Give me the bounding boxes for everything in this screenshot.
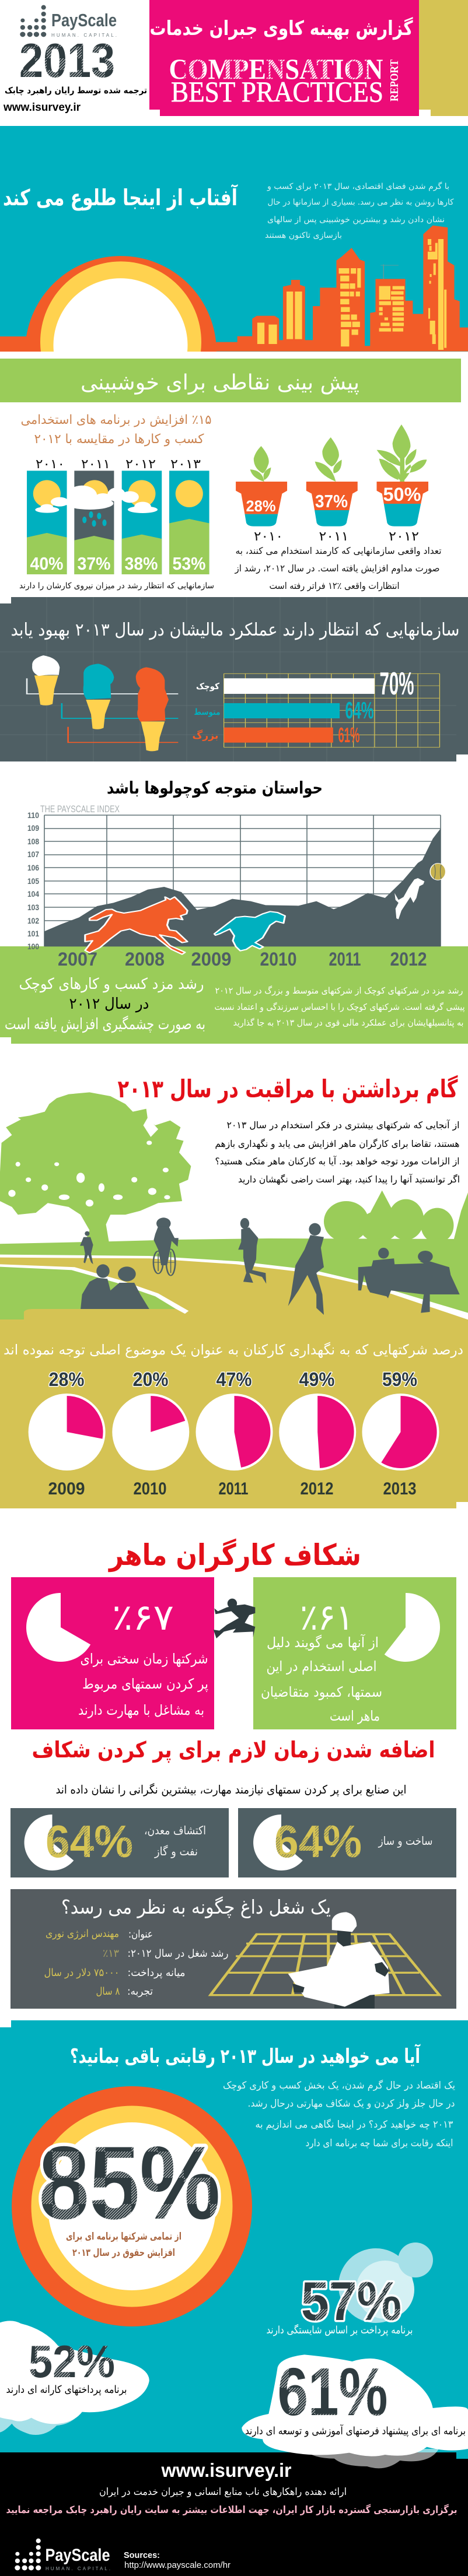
pie 2013: 2013 bbox=[383, 1479, 417, 1498]
weather values bbox=[30, 553, 205, 574]
pot years: ۲۰۱۰ bbox=[254, 529, 283, 544]
chart label: THE PAYSCALE INDEX bbox=[40, 803, 120, 815]
highlight text bbox=[5, 975, 205, 1033]
best practices: BEST PRACTICES bbox=[171, 75, 383, 108]
panel: hot job bbox=[11, 1889, 456, 2009]
heading: آفتاب از اینجا طلوع می کند bbox=[3, 184, 238, 210]
pie 2011: 2011 bbox=[218, 1479, 249, 1498]
text: از آنها می گویند دلیل bbox=[267, 1634, 379, 1651]
label medium: متوسط bbox=[194, 707, 221, 717]
heading: skills gap: شکاف کارگران ماهر bbox=[107, 1538, 361, 1573]
person: small walker bbox=[80, 1231, 93, 1264]
index area bbox=[44, 829, 441, 946]
panel: title banner bbox=[149, 0, 419, 116]
panel: construction bbox=[238, 1808, 456, 1877]
ball bbox=[430, 864, 446, 880]
highlight text: رشد مزد کسب و کارهای کوچک bbox=[19, 975, 204, 993]
panel: stay competitive bbox=[0, 2020, 468, 2468]
intro text: در حال جلز ولز کردن و یک شکاف مهارتی درحال رشد. bbox=[247, 2098, 455, 2110]
weather values: 40% bbox=[30, 553, 63, 574]
plant pots chart bbox=[236, 424, 428, 527]
weather values: 53% bbox=[173, 553, 205, 574]
axis numbers: 103 bbox=[27, 903, 39, 912]
body text: careful steps: از الزامات مورد توجه خواهد بود. آیا به کارکنان ماهر متکی هستید؟ bbox=[215, 1156, 460, 1167]
52 percent caption: برنامه پرداختهای کارانه ای دارند bbox=[6, 2384, 127, 2396]
grid bbox=[44, 815, 441, 946]
body text: careful steps: هستند، تقاضا برای کارگران ماهر افزایش می یابد و نگهداری بازهم bbox=[215, 1138, 460, 1150]
pot years bbox=[254, 529, 419, 544]
panel: mining: اکتشاف معدن، bbox=[144, 1823, 206, 1837]
panel: mining bbox=[11, 1808, 229, 1877]
weather caption: سازمانهایی که انتظار رشد در میزان نیروی کارشان را دارند bbox=[19, 581, 214, 591]
panel: forecast heading: پیش بینی نقاطی برای خوشبینی bbox=[81, 371, 359, 395]
intro text: نشان دادن رشد و بیشترین خوشبینی پس از سالهای bbox=[267, 215, 445, 224]
value medium: 64% bbox=[345, 697, 373, 724]
axis numbers: 105 bbox=[27, 876, 39, 886]
header logo: PayScale: HUMAN. CAPITAL. bbox=[51, 33, 117, 38]
ice cream cones bbox=[27, 655, 178, 751]
axis numbers: 107 bbox=[27, 850, 39, 859]
body text bbox=[215, 985, 464, 1029]
intro text: بازسازی تاکنون هستند bbox=[265, 231, 342, 240]
axis numbers: 108 bbox=[27, 837, 39, 846]
pie 2012 bbox=[279, 1368, 356, 1498]
highlight text: به صورت چشمگیری افزایش یافته است bbox=[5, 1015, 205, 1033]
grass bbox=[0, 1238, 468, 1324]
weather years bbox=[36, 457, 201, 472]
text: شرکتها زمان سختی برای bbox=[81, 1651, 208, 1667]
weather chart bbox=[27, 471, 209, 574]
orange dog bbox=[85, 897, 187, 954]
pot 2010 bbox=[236, 482, 287, 527]
subheading: hiring increase: ٪۱۵ افزایش در برنامه های استخدامی bbox=[21, 413, 211, 427]
hiring text: انتظارات واقعی ٪۱۲ فراتر رفته است bbox=[270, 580, 399, 592]
year 2013: 2013 bbox=[19, 33, 115, 87]
pot 2011 bbox=[306, 482, 358, 527]
rain bbox=[82, 511, 107, 527]
subheading: این صنایع برای پر کردن سمتهای نیازمند مهارت، بیشترین نگرانی را نشان داده اند bbox=[56, 1782, 406, 1797]
city skyline bbox=[209, 226, 468, 352]
far trees bbox=[324, 1191, 468, 1243]
value small: 70% bbox=[379, 665, 414, 701]
hiring text: صورت مداوم افزایش یافته است. در سال ۲۰۱۲، رشد از bbox=[235, 563, 440, 574]
panel 2012 bbox=[122, 471, 162, 574]
job title: عنوان: bbox=[128, 1928, 153, 1940]
body text: careful steps bbox=[215, 1119, 460, 1185]
label small: کوچک bbox=[196, 681, 219, 692]
85 percent caption bbox=[66, 2231, 181, 2259]
large tree bbox=[0, 1092, 191, 1242]
value large: 61% bbox=[338, 723, 359, 747]
axis numbers: 101 bbox=[27, 929, 39, 938]
panel: financial performance bbox=[0, 597, 468, 761]
pale cloud bbox=[338, 2242, 433, 2323]
axis numbers: 110 bbox=[27, 810, 39, 820]
pie 2010: 2010 bbox=[133, 1479, 167, 1498]
pie 2013: 59% bbox=[382, 1368, 417, 1390]
pot values: 50% bbox=[383, 484, 421, 505]
panel: sunrise bbox=[0, 126, 468, 352]
panel: small business growth bbox=[0, 946, 468, 1044]
highlight text: در سال ۲۰۱۲ bbox=[69, 995, 149, 1013]
body text: careful steps: اگر توانستید آنها را پیدا کنید، بهتر است راضی نگهشان دارید bbox=[238, 1174, 460, 1185]
pot values: 28% bbox=[246, 497, 275, 515]
pie 2009: 2009 bbox=[48, 1479, 85, 1498]
intro text bbox=[223, 2079, 455, 2149]
body text: رشد مزد در شرکتهای کوچک از شرکتهای متوسط و بزرگ در سال ۲۰۱۲ bbox=[215, 985, 463, 996]
axis numbers: 106 bbox=[27, 863, 39, 872]
cover bbox=[0, 1309, 185, 1324]
text: اصلی استخدام در این bbox=[266, 1658, 377, 1675]
57 percent: 57% bbox=[301, 2270, 401, 2332]
pie 2011 bbox=[196, 1368, 273, 1498]
heading: یک شغل داغ چگونه به نظر می رسد؟ bbox=[61, 1896, 331, 1918]
park illustration bbox=[0, 1092, 468, 1324]
text: سمتها، کمبود متقاضیان bbox=[261, 1684, 382, 1700]
pot years: ۲۰۱۲ bbox=[389, 529, 419, 544]
body text: careful steps: از آنجایی که شرکتهای بیشتری در فکر استخدام در سال ۲۰۱۳ bbox=[226, 1119, 460, 1131]
pie 2012: 49% bbox=[299, 1368, 335, 1390]
weather values: 37% bbox=[77, 553, 111, 574]
footer bbox=[6, 2459, 457, 2571]
85 percent caption: از تمامی شرکتها برنامه ای برای bbox=[66, 2231, 181, 2242]
body text: به پتانسیلهایشان برای عملکرد مالی قوی در سال ۲۰۱۳ به جا گذارید bbox=[233, 1017, 463, 1029]
white dog bbox=[394, 878, 424, 920]
hiring text bbox=[235, 545, 441, 592]
person: runner bbox=[238, 1218, 266, 1284]
sun bbox=[0, 256, 216, 352]
median pay: ۷۵۰۰۰ دلار در سال bbox=[44, 1967, 120, 1979]
payscale index chart bbox=[27, 810, 446, 954]
footer logo: HUMAN. CAPITAL. bbox=[46, 2566, 110, 2571]
translator credit: ترجمه شده توسط رایان راهبرد چابک bbox=[5, 85, 147, 96]
text bbox=[78, 1651, 208, 1718]
text: پر کردن سمتهای مربوط bbox=[82, 1676, 208, 1692]
chart years: 2009 bbox=[191, 949, 231, 970]
pie 2011: 47% bbox=[216, 1368, 252, 1390]
median pay: میانه پرداخت: bbox=[127, 1967, 186, 1979]
pie bbox=[385, 1593, 440, 1662]
panel 2010 bbox=[27, 471, 67, 574]
chart years: 2011 bbox=[329, 949, 361, 970]
panel 2013 bbox=[169, 471, 209, 574]
intro text: کارها روشن به نظر می رسد. بسیاری از سازمانها در حال bbox=[267, 198, 454, 207]
52 percent: 52% bbox=[29, 2336, 115, 2387]
experience bbox=[96, 1985, 153, 1998]
text: ماهر است bbox=[330, 1708, 380, 1724]
pie 2010: 20% bbox=[133, 1368, 168, 1390]
compensation: COMPENSATION bbox=[169, 52, 383, 85]
value: ٪۶۱ bbox=[300, 1596, 354, 1638]
panel: retention bbox=[0, 1319, 468, 1508]
panel: mining: 64% bbox=[46, 1816, 133, 1867]
path bbox=[0, 1255, 468, 1324]
pie 2010 bbox=[112, 1368, 189, 1498]
job title: مهندس انرژی نوری bbox=[46, 1928, 119, 1940]
report: REPORT bbox=[388, 59, 401, 101]
axis numbers: 102 bbox=[27, 916, 39, 925]
footer line: ارائه دهنده راهکارهای ناب منابع انسانی و جبران خدمت در ایران bbox=[99, 2486, 347, 2498]
intro text: با گرم شدن فضای اقتصادی، سال ۲۰۱۳ برای کسب و bbox=[267, 181, 449, 191]
panel: forecast heading bbox=[0, 359, 461, 402]
pie bbox=[26, 1593, 90, 1662]
person: cyclist bbox=[153, 1217, 179, 1276]
axis numbers: 104 bbox=[27, 889, 39, 899]
panel: mining: نفت و گاز bbox=[154, 1844, 198, 1858]
pie 2009 bbox=[29, 1368, 106, 1498]
footer black band bbox=[0, 2452, 468, 2576]
footer website: www.isurvey.ir bbox=[161, 2459, 292, 2481]
chart years: 2007 bbox=[58, 949, 97, 970]
axis numbers: 100 bbox=[27, 942, 39, 951]
job growth: رشد شغل در سال ۲۰۱۲: bbox=[127, 1947, 229, 1960]
header logo: PayScale bbox=[20, 5, 117, 38]
worker bbox=[288, 1912, 390, 2009]
panel: construction: ساخت و ساز bbox=[378, 1834, 433, 1848]
85 percent caption: افزایش حقوق در سال ۲۰۱۳ bbox=[72, 2247, 175, 2259]
panel: 67 percent bbox=[11, 1577, 214, 1729]
pot 2012 bbox=[377, 482, 428, 527]
experience: تجربه: bbox=[127, 1985, 153, 1998]
pie 2012: 2012 bbox=[300, 1479, 334, 1498]
panel: 61 percent bbox=[253, 1577, 456, 1729]
pot values: 37% bbox=[315, 491, 348, 511]
footer logo bbox=[15, 2539, 110, 2571]
intro text bbox=[265, 181, 454, 240]
chart years: 2008 bbox=[125, 949, 165, 970]
bar chart bbox=[193, 665, 439, 747]
big sun bbox=[12, 2086, 252, 2326]
left cloud bbox=[0, 2321, 149, 2435]
plants bbox=[250, 424, 427, 482]
subheading: hiring increase bbox=[21, 413, 211, 447]
85 percent: 85% bbox=[39, 2125, 221, 2241]
chart years: 2012 bbox=[390, 949, 427, 970]
pot years: ۲۰۱۱ bbox=[319, 529, 349, 544]
footer logo: PayScale bbox=[46, 2546, 110, 2565]
value: ٪۶۷ bbox=[112, 1596, 174, 1638]
people on bench bbox=[358, 1248, 460, 1313]
text: به مشاغل با مهارت دارند bbox=[78, 1702, 204, 1718]
chart years: 2010 bbox=[260, 949, 296, 970]
heading: small companies: حواستان متوجه کوچولوها باشد bbox=[107, 778, 323, 798]
61 percent: 61% bbox=[278, 2354, 387, 2430]
icon: jumping man bbox=[214, 1599, 255, 1638]
pot values bbox=[246, 484, 421, 515]
experience: ۸ سال bbox=[96, 1985, 120, 1998]
clouds bbox=[35, 486, 158, 513]
right cloud bbox=[242, 2354, 468, 2468]
teal dog bbox=[214, 911, 285, 951]
person: woman walking bbox=[288, 1223, 324, 1315]
intro text: یک اقتصاد در حال گرم شدن، یک بخش کسب و کاری کوچک bbox=[223, 2079, 455, 2091]
pie 2009: 28% bbox=[49, 1368, 84, 1390]
chart years bbox=[58, 949, 427, 970]
weather values: 38% bbox=[125, 553, 158, 574]
text bbox=[261, 1634, 382, 1724]
sources bbox=[124, 2550, 230, 2570]
weather years: ۲۰۱۱ bbox=[81, 457, 110, 472]
sources: Sources: bbox=[124, 2550, 160, 2560]
intro text: اینکه رقابت برای شما چه برنامه ای دارد bbox=[306, 2138, 453, 2149]
axis numbers bbox=[27, 810, 39, 951]
57 percent caption: برنامه پرداخت بر اساس شایستگی دارند bbox=[266, 2324, 413, 2336]
axis numbers: 109 bbox=[27, 823, 39, 833]
heading: آیا می خواهید در سال ۲۰۱۳ رقابتی باقی بمانید؟ bbox=[70, 2044, 421, 2068]
solar panel bbox=[211, 1934, 439, 1995]
header logo: PayScale: PayScale bbox=[51, 10, 117, 30]
sources: http://www.payscale.com/hr bbox=[124, 2560, 230, 2570]
couple foreground bbox=[81, 1264, 149, 1309]
white sun bottom bbox=[54, 352, 187, 359]
panel 2011 bbox=[74, 471, 114, 574]
weather years: ۲۰۱۲ bbox=[125, 457, 156, 472]
job growth: ٪۱۳ bbox=[103, 1947, 119, 1960]
weather years: ۲۰۱۰ bbox=[36, 457, 65, 472]
subheading: hiring increase: کسب و کارها در مقایسه با ۲۰۱۲ bbox=[34, 432, 204, 447]
intro text: ۲۰۱۳ چه خواهید کرد؟ در اینجا نگاهی می اندازیم به bbox=[256, 2118, 453, 2131]
heading: درصد شرکتهایی که به نگهداری کارکنان به عنوان یک موضوع اصلی توجه نموده اند bbox=[4, 1342, 463, 1358]
pie 2013 bbox=[362, 1368, 439, 1498]
website: www.isurvey.ir bbox=[3, 101, 81, 114]
label large: بزرگ bbox=[193, 730, 218, 742]
panel: construction: 64% bbox=[274, 1816, 362, 1867]
weather years: ۲۰۱۳ bbox=[170, 457, 201, 472]
title persian: گزارش بهینه کاوی جبران خدمات bbox=[149, 17, 413, 40]
median pay bbox=[44, 1967, 186, 1979]
panel: khaki corner bbox=[419, 0, 468, 116]
hiring text: تعداد واقعی سازمانهایی که کارمند استخدام می کنند، به bbox=[236, 545, 441, 557]
